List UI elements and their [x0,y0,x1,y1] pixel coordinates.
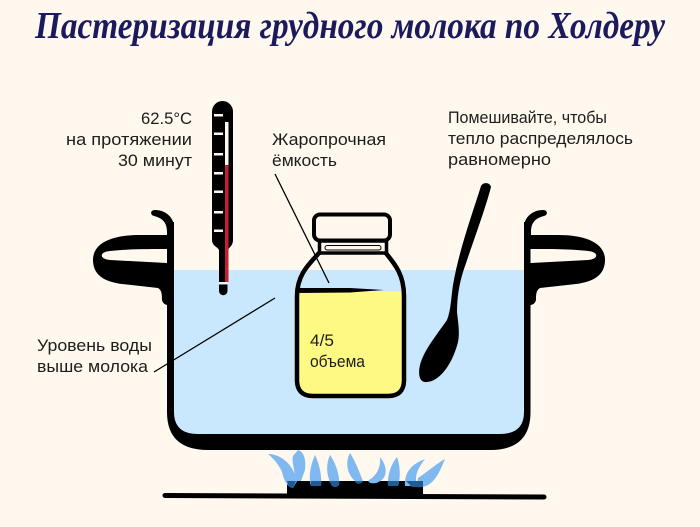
right handle [524,210,605,305]
label: stir: тепло распределялось [448,129,633,148]
label: stir [448,108,633,169]
thermometer [212,101,233,295]
label: container: Жаропрочная [272,130,386,149]
label: volume [310,331,365,371]
burner [287,481,423,498]
label: temperature [66,109,192,170]
jar lid [314,214,390,240]
left handle [93,210,174,305]
label: container: ёмкость [272,151,337,170]
label: temperature: 30 минут [118,151,192,170]
label: temperature: 62.5°C [141,109,192,128]
label: container [272,130,386,170]
thermometer mercury [225,165,228,282]
milk [298,291,404,396]
spoon [419,183,491,382]
thermometer tube [225,122,228,166]
pot body [167,222,530,450]
jar neck [320,241,386,253]
water in pot [172,270,526,436]
pointer: container [275,174,329,283]
pointer: water level [154,298,275,372]
label: stir: Помешивайте, чтобы [448,108,607,127]
label: water level: выше молока [37,357,149,376]
thermometer ticks [214,114,223,232]
pot [93,210,605,450]
label: volume: объема [310,352,365,371]
flames [268,450,445,488]
thermometer body [212,101,233,284]
jar outline [297,252,404,396]
milk line [298,288,384,293]
jar [297,214,404,396]
flame bases on burner [287,481,423,488]
stove line [165,496,544,497]
label: stir: равномерно [448,150,551,169]
label: temperature: на протяжении [66,130,192,149]
thermometer bulb [219,284,228,295]
label: water level [37,336,152,376]
label: water level: Уровень воды [37,336,152,355]
label: volume: 4/5 [310,331,334,350]
